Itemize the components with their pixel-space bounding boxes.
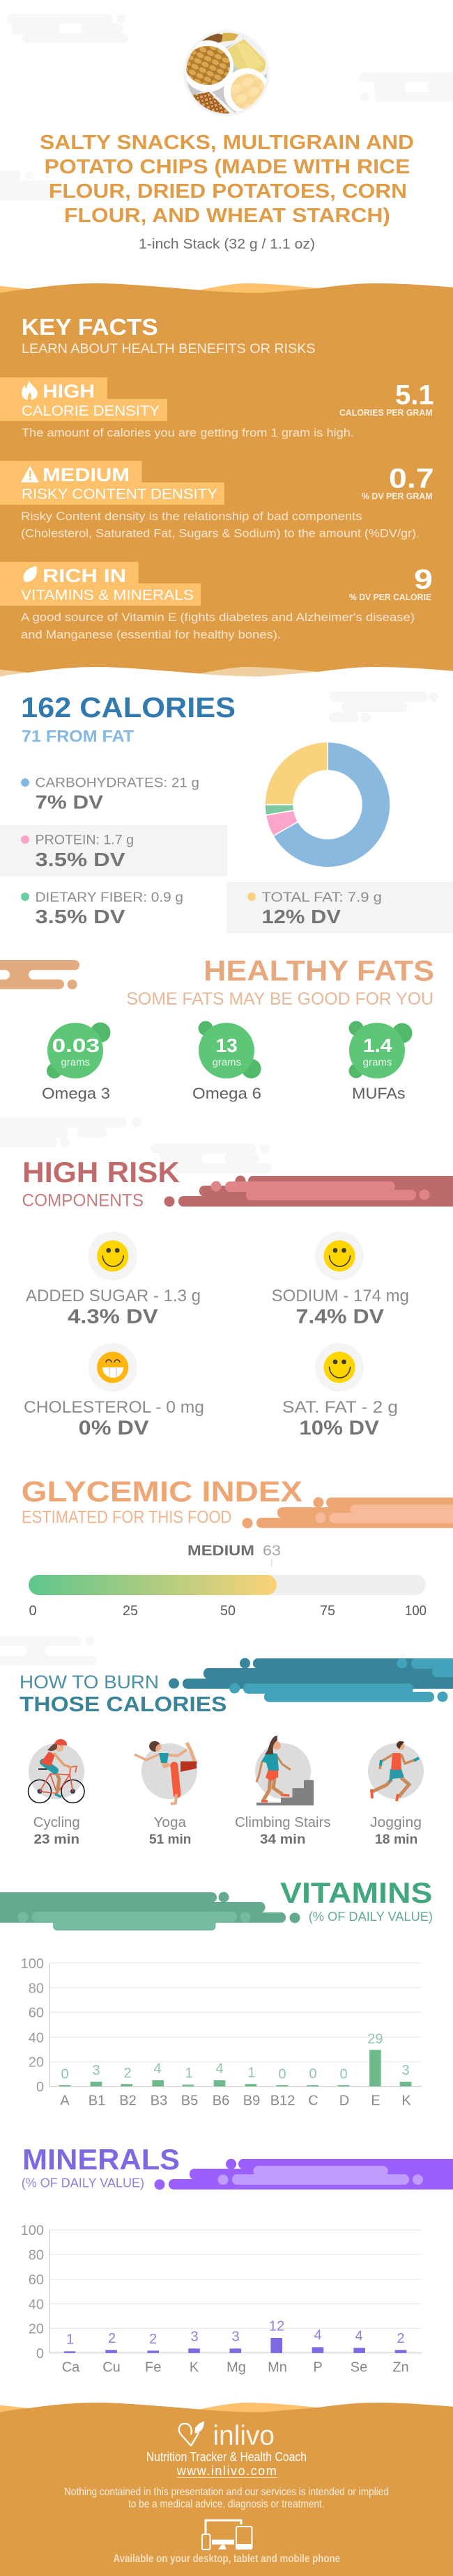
decorative cloud left of title [0,171,91,201]
bar chart: minerals: 4 [314,2328,322,2343]
vitamins description: and Manganese (essential for healthy bones). [21,628,281,641]
heading: key facts: LEARN ABOUT HEALTH BENEFITS OR RISKS [22,341,316,356]
vitamins banner [0,562,201,606]
bar chart: minerals: 4 [355,2329,363,2344]
bar chart: minerals: 2 [108,2331,116,2346]
activity: jogging [368,1741,424,1847]
subheading: healthy fats: SOME FATS MAY BE GOOD FOR YOU [127,990,433,1009]
risky content description [21,510,420,540]
legend: protein: PROTEIN: 1.7 g [35,833,134,848]
bar chart: minerals: K [190,2360,199,2375]
decorative purple bars [155,2159,453,2190]
bar chart: vitamins: 20 [29,2055,44,2071]
bar chart: vitamins: 4 [153,2061,162,2077]
heading: how to burn: HOW TO BURN [20,1672,159,1693]
bar chart: vitamins: 0 [36,2080,44,2095]
calorie density banner [0,377,167,421]
bubble: omega 3: 0.03 [52,1035,100,1056]
gauge bar [29,1575,426,1595]
bar chart: vitamins: 60 [29,2006,44,2021]
disclaimer: to be a medical advice, diagnosis or treatment. [128,2498,325,2510]
heading: high risk: HIGH RISK [22,1156,180,1188]
subheading: from fat: 71 FROM FAT [22,728,134,746]
item: added sugar [26,1232,201,1328]
subheading: vitamins: (% OF DAILY VALUE) [309,1909,433,1924]
heading: key facts [22,315,316,356]
bubble: MUFAs: grams [363,1057,392,1069]
activity: cycling: 23 min [33,1832,79,1847]
bar chart: vitamins: 1 [247,2066,256,2081]
legend: dietary fiber [21,890,183,927]
availability note: Available on your desktop, tablet and mobile phone [113,2553,340,2565]
heading: healthy fats: HEALTHY FATS [204,954,434,987]
legend: dietary fiber: DIETARY FIBER: 0.9 g [35,890,183,905]
decorative cloud top right [359,72,453,102]
item: saturated fat [282,1343,398,1440]
bubble: omega 6 [192,1021,261,1102]
panel: footer [0,2403,453,2576]
legend: protein: 3.5% DV [35,849,125,870]
bubble: omega 6: 13 [216,1035,238,1056]
bar chart: vitamins: B1 [89,2093,105,2108]
heading: glycemic index: GLYCEMIC INDEX [22,1475,302,1508]
vitamins banner: RICH IN [43,565,126,586]
bar chart: minerals: 80 [29,2247,44,2263]
item: added sugar: 4.3% DV [68,1306,158,1328]
activity: climbing stairs: Climbing Stairs [235,1815,331,1830]
value label: 63 [263,1543,281,1559]
legend: protein [21,833,134,870]
calorie density banner: CALORIE DENSITY [22,402,160,419]
decorative cloud by calories [329,691,438,723]
icon: flame [22,381,38,400]
panel: vitamins [0,1876,433,2108]
logo: inlivo: inlivo [213,2421,275,2451]
activity: yoga: 51 min [149,1832,191,1847]
heading: calories: 162 CALORIES [21,691,236,723]
legend: carbohydrates: CARBOHYDRATES: 21 g [35,776,199,791]
decorative pale clouds above high risk [0,1117,272,1173]
logo: inlivo [179,2421,275,2451]
calorie density value: 5.1 [395,380,434,411]
panel: high risk components [22,1156,453,1440]
legend: total fat: TOTAL FAT: 7.9 g [262,890,382,905]
bar chart: minerals [21,2223,422,2375]
bar chart: vitamins: B12 [270,2093,295,2108]
value label: MEDIUM [187,1543,254,1559]
risky content value [362,464,434,501]
title: FLOUR, DRIED POTATOES, CORN [49,180,407,203]
decorative pale cloud above burn [0,1636,97,1665]
bar chart: vitamins: 2 [123,2066,132,2081]
risky content value: % DV PER GRAM [362,492,432,501]
risky content description: Risky Content density is the relationship of bad components [21,510,362,523]
panel: how to burn those calories [20,1658,453,1847]
decorative green bars [0,1892,300,1931]
heading: vitamins: VITAMINS [280,1876,432,1909]
title [40,132,414,227]
bar chart: vitamins: B2 [119,2093,137,2108]
gauge scale: 25 [123,1603,138,1619]
panel: glycemic index [22,1475,453,1619]
bar chart: vitamins: 29 [367,2032,383,2047]
calorie density value: CALORIES PER GRAM [339,408,432,418]
panel: calories [0,691,453,934]
bar chart: vitamins: 3 [92,2063,100,2078]
bar chart: vitamins: B6 [213,2093,229,2108]
activity: yoga: Yoga [153,1815,187,1830]
bar chart: minerals: 3 [231,2330,240,2345]
risky content banner [0,461,224,505]
food photo: snacks [182,30,273,118]
bar chart: minerals: 0 [36,2346,44,2362]
bubble: omega 6: grams [213,1057,241,1069]
bubble: omega 3 [42,1022,110,1102]
activity: cycling [28,1739,84,1847]
bar chart: minerals: Cu [102,2360,121,2375]
website link: www.inlivo.com [176,2464,277,2478]
decorative orange bars [243,1497,453,1528]
bar chart: vitamins: 3 [401,2063,410,2078]
vitamins value: 9 [414,565,433,595]
icon: leaf [24,566,37,582]
gauge scale: 75 [320,1603,335,1619]
vitamins value: % DV PER CALORIE [349,592,431,602]
panel: minerals [21,2143,453,2375]
bar chart: vitamins: C [308,2093,318,2108]
risky content value: 0.7 [389,464,434,494]
disclaimer [64,2486,389,2510]
bubble: omega 3: Omega 3 [42,1085,110,1102]
item: added sugar: ADDED SUGAR - 1.3 g [26,1287,201,1305]
tagline: Nutrition Tracker & Health Coach [146,2450,307,2464]
gauge scale [29,1603,427,1619]
decorative teal bars [169,1658,453,1702]
heading: key facts: KEY FACTS [22,315,158,340]
activity: yoga [135,1741,197,1847]
legend: carbohydrates: 7% DV [35,792,103,813]
item: saturated fat: SAT. FAT - 2 g [282,1398,398,1417]
gauge scale: 50 [220,1603,236,1619]
bar chart: minerals: 100 [21,2223,44,2238]
activity: climbing stairs [235,1736,331,1847]
activity: climbing stairs: 34 min [260,1832,305,1847]
legend: total fat [247,890,382,927]
bubble: MUFAs: MUFAs [352,1085,406,1102]
bar chart: minerals: Se [351,2360,367,2375]
panel: healthy fats [0,954,434,1102]
decorative cloud top left [7,14,128,43]
bar chart: minerals: Zn [392,2360,409,2375]
bar chart: vitamins: B9 [243,2093,260,2108]
calorie density value [339,380,434,418]
value label [187,1543,281,1566]
vitamins description [21,611,415,641]
panel: key facts [0,283,453,680]
icon: devices [202,2520,252,2550]
bar chart: vitamins: 0 [278,2067,286,2082]
subheading: glycemic: ESTIMATED FOR THIS FOOD [22,1509,231,1527]
bar chart: vitamins: 0 [339,2067,348,2082]
calorie density description: The amount of calories you are getting from 1 gram is high. [22,426,354,439]
risky content banner: MEDIUM [43,464,130,485]
subheading: components: COMPONENTS [22,1192,144,1211]
item: cholesterol [24,1343,204,1440]
bar chart: vitamins [21,1956,422,2108]
white wave below key facts [0,667,453,686]
bar chart: vitamins: 1 [185,2066,193,2081]
bar chart: minerals: P [313,2360,323,2375]
bar chart: minerals: 3 [190,2330,199,2345]
item: sodium: 7.4% DV [295,1306,385,1328]
risky content banner: RISKY CONTENT DENSITY [22,485,217,503]
bar chart: minerals: Ca [62,2360,80,2375]
bar chart: vitamins: 0 [309,2066,317,2082]
vitamins banner: VITAMINS & MINERALS [21,586,194,603]
decorative tan bars [0,960,79,989]
item: saturated fat: 10% DV [299,1417,380,1440]
heading: those calories: THOSE CALORIES [20,1692,227,1716]
risky content description: (Cholesterol, Saturated Fat, Sugars & Sodium) to the amount (%DV/gr). [21,527,420,540]
disclaimer: Nothing contained in this presentation and our services is intended or implied [64,2486,389,2498]
serving size: 1-inch Stack (32 g / 1.1 oz) [139,237,315,252]
title: FLOUR, AND WHEAT STARCH) [64,205,390,227]
gauge scale: 100 [405,1603,427,1619]
bar chart: minerals: 12 [269,2319,284,2334]
legend: carbohydrates [21,776,199,813]
legend: dietary fiber: 3.5% DV [35,906,125,927]
bar chart: minerals: Mn [268,2360,287,2375]
bar chart: vitamins: 40 [29,2030,44,2045]
bar chart: minerals: 40 [29,2297,44,2312]
legend: total fat: 12% DV [262,906,341,927]
donut chart [265,742,390,867]
gauge scale: 0 [29,1603,37,1619]
bar chart: vitamins: B5 [181,2093,198,2108]
activity: cycling: Cycling [33,1815,80,1830]
calorie density banner: HIGH [43,381,95,402]
bar chart: vitamins: 0 [61,2067,69,2082]
activity: jogging: Jogging [370,1815,422,1830]
item: sodium: SODIUM - 174 mg [272,1287,409,1305]
bar chart: minerals: Fe [145,2360,161,2375]
bar chart: minerals: 2 [149,2332,157,2347]
title: POTATO CHIPS (MADE WITH RICE [45,156,410,178]
icon: warning triangle [21,466,39,482]
decorative red bars [164,1175,453,1207]
item: cholesterol: CHOLESTEROL - 0 mg [24,1398,204,1417]
legend row backgrounds [0,825,453,934]
vitamins value [349,565,433,602]
bar chart: minerals: 20 [29,2322,44,2337]
bar chart: vitamins: 100 [21,1956,44,1972]
bar chart: minerals: 1 [66,2332,74,2348]
bar chart: vitamins: E [371,2093,381,2108]
bubble: omega 3: grams [61,1057,90,1069]
bar chart: vitamins: B3 [151,2093,167,2108]
bar chart: minerals: 60 [29,2272,44,2288]
vitamins description: A good source of Vitamin E (fights diabetes and Alzheimer's disease) [21,611,415,624]
subheading: minerals: (% OF DAILY VALUE) [22,2176,144,2190]
item: cholesterol: 0% DV [79,1417,149,1440]
heading: minerals: MINERALS [22,2143,180,2176]
bar chart: minerals: Mg [227,2360,246,2375]
activity: jogging: 18 min [375,1832,417,1847]
item: sodium [272,1232,409,1328]
bubble: MUFAs [348,1021,413,1102]
bar chart: vitamins: 80 [29,1981,44,1997]
bar chart: vitamins: D [339,2093,349,2108]
bar chart: minerals: 2 [397,2331,405,2346]
bar chart: vitamins: A [60,2093,70,2108]
bubble: omega 6: Omega 6 [192,1085,261,1102]
bar chart: vitamins: K [401,2093,411,2108]
bubble: MUFAs: 1.4 [363,1035,392,1056]
title: SALTY SNACKS, MULTIGRAIN AND [40,132,414,154]
bar chart: vitamins: 4 [215,2061,224,2077]
